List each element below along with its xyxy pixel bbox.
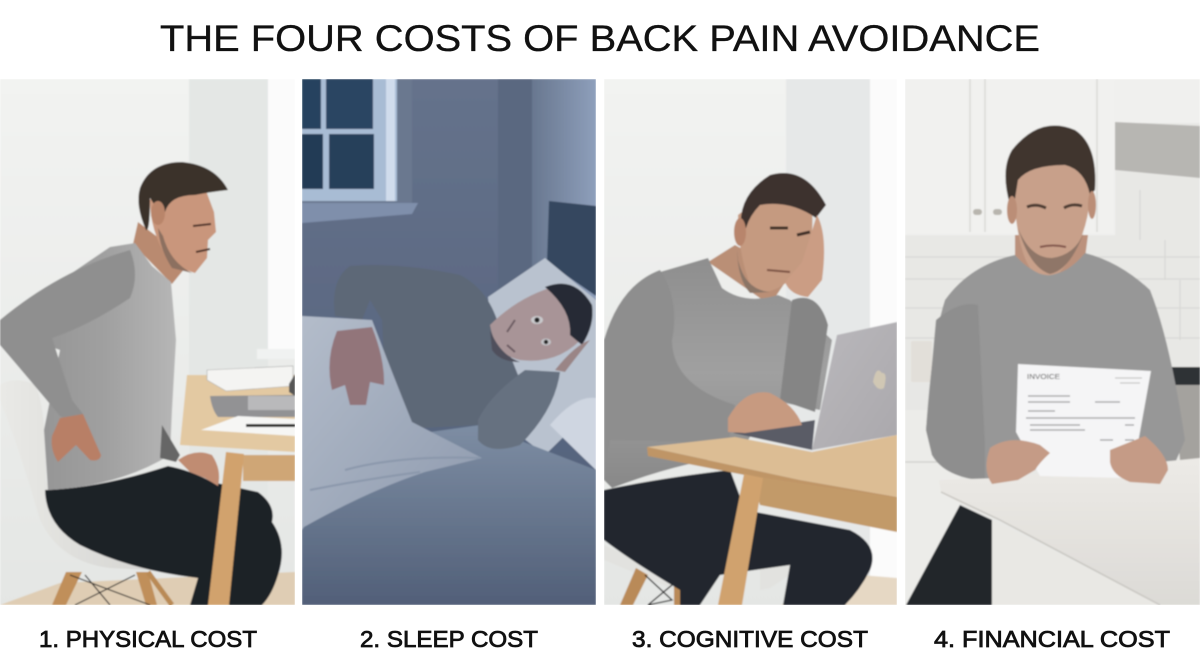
range hood [1115, 122, 1200, 178]
hand on duvet [329, 327, 384, 405]
hand on thigh [178, 452, 219, 486]
pillows [488, 258, 596, 470]
label: financial cost: 4. FINANCIAL COST [934, 626, 1170, 652]
panel: physical cost photo [0, 79, 295, 605]
neck [1014, 234, 1089, 274]
laptop [733, 322, 897, 450]
invoice paper [1016, 364, 1151, 478]
sweater [0, 243, 180, 490]
head and hand [734, 173, 826, 297]
desk top [180, 375, 295, 452]
bed sheet [302, 425, 596, 568]
canister [911, 341, 932, 382]
panel: cognitive cost photo [604, 79, 897, 605]
window [302, 79, 418, 223]
sweater [926, 253, 1185, 480]
neck [133, 222, 190, 284]
hand on keyboard [728, 392, 802, 433]
panel: sleep cost photo [302, 79, 596, 605]
pants [45, 466, 282, 605]
title: THE FOUR COSTS OF BACK PAIN AVOIDANCE [160, 18, 1040, 59]
left hand [986, 440, 1050, 484]
kitchen cabinets [905, 79, 1200, 235]
neck [708, 244, 784, 300]
pants [906, 505, 992, 605]
head [490, 284, 593, 372]
open laptop and papers [201, 366, 295, 436]
table [647, 435, 897, 605]
tile backsplash [905, 190, 1200, 340]
hand on lower back [52, 414, 101, 462]
counter [939, 458, 1200, 605]
label: sleep cost: 2. SLEEP COST [360, 626, 538, 652]
stove [1175, 384, 1200, 460]
desk leg [208, 452, 244, 605]
label: physical cost: 1. PHYSICAL COST [39, 626, 257, 652]
chair [34, 388, 174, 605]
head [1005, 126, 1096, 275]
panel: financial cost photo [905, 79, 1200, 605]
pants [604, 470, 872, 605]
headboard [547, 201, 596, 296]
sweater and arms [334, 265, 560, 449]
right hand [1110, 436, 1168, 484]
desk apron [243, 455, 295, 481]
sweater [604, 258, 832, 488]
label: cognitive cost: 3. COGNITIVE COST [632, 626, 868, 652]
duvet [302, 316, 482, 530]
invoice paper: INVOICE [1027, 372, 1060, 381]
head [138, 162, 228, 273]
chair [620, 566, 789, 605]
